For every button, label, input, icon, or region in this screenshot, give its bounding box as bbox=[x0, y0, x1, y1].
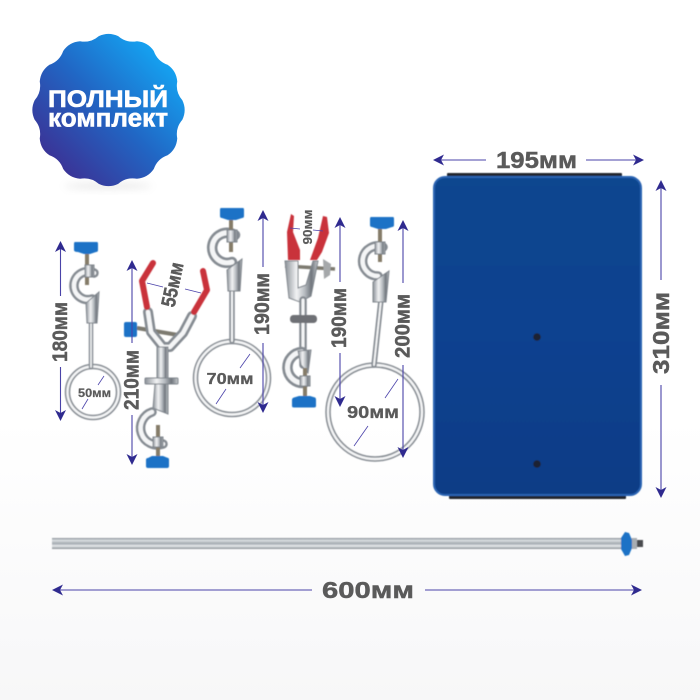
nut bbox=[227, 230, 237, 242]
nut bbox=[85, 265, 94, 277]
blue side knob bbox=[124, 322, 137, 337]
arrow bbox=[660, 187, 662, 491]
lower nut bbox=[153, 437, 163, 447]
arrow bbox=[339, 224, 341, 400]
hook bbox=[212, 233, 235, 263]
label: 195мм bbox=[496, 147, 577, 173]
red right prong bbox=[310, 216, 329, 260]
plate body bbox=[434, 177, 641, 495]
hook bbox=[363, 246, 383, 276]
arrowhead right bbox=[633, 154, 644, 166]
ring bbox=[196, 342, 268, 414]
label: 55мм bbox=[158, 260, 189, 309]
arrow bbox=[402, 227, 404, 451]
ring bbox=[328, 365, 422, 459]
arrowhead bottom bbox=[55, 410, 66, 421]
arrowhead top bbox=[656, 180, 666, 191]
arrow bbox=[60, 248, 62, 414]
upper stem bbox=[157, 347, 168, 380]
leader lines bbox=[216, 354, 250, 404]
ring clamp 50 mm bbox=[68, 242, 118, 418]
nut bbox=[300, 376, 310, 386]
arrowhead right bbox=[631, 584, 642, 596]
badge: full set bbox=[32, 34, 185, 189]
dark plate bbox=[290, 315, 317, 323]
cross plate bbox=[145, 378, 178, 384]
red left prong bbox=[142, 263, 153, 307]
arrowhead top bbox=[398, 220, 408, 231]
lower hole bbox=[533, 460, 541, 468]
dimension: 600 mm bbox=[52, 577, 642, 603]
label: 180мм bbox=[49, 302, 72, 362]
lower knob bbox=[146, 456, 169, 468]
collar bbox=[373, 271, 389, 302]
clamp body bbox=[285, 261, 318, 302]
label: 90мм bbox=[300, 210, 315, 244]
stem bbox=[374, 300, 381, 365]
knob bbox=[292, 396, 316, 408]
hook bbox=[74, 272, 94, 300]
badge text line 2: комплект bbox=[48, 102, 168, 132]
arrowhead bottom bbox=[334, 396, 346, 407]
arrowhead top bbox=[126, 260, 138, 271]
washer bbox=[629, 538, 637, 549]
collar bbox=[227, 259, 242, 291]
arrowhead top bbox=[334, 217, 346, 228]
screw bbox=[303, 368, 307, 398]
blue nut bbox=[621, 532, 632, 556]
jaws bbox=[148, 312, 192, 347]
ring clamp 90 mm bbox=[328, 217, 422, 459]
threaded end bbox=[636, 540, 643, 547]
ring bbox=[68, 366, 118, 418]
lower body bbox=[153, 384, 168, 414]
dimension: 190 mm ring bbox=[251, 210, 274, 413]
dimension: 310 mm bbox=[648, 180, 674, 498]
cross bar bbox=[137, 328, 178, 335]
bottom strip bbox=[449, 491, 626, 499]
red left prong bbox=[287, 214, 300, 260]
dimension: 90 mm ring bbox=[347, 379, 399, 446]
badge shape bbox=[32, 34, 185, 186]
dimension: 190 mm clamp bbox=[328, 217, 351, 407]
dimension: 90 mm jaws bbox=[290, 210, 323, 244]
label: 600мм bbox=[322, 577, 414, 603]
screw bbox=[229, 218, 233, 252]
leader lines bbox=[354, 379, 398, 446]
leader lines bbox=[147, 283, 201, 293]
top strip bbox=[447, 173, 622, 181]
stem bbox=[89, 322, 93, 367]
arrowhead left bbox=[52, 584, 63, 596]
lower screw bbox=[156, 425, 160, 457]
collar bbox=[298, 350, 311, 373]
label: 310мм bbox=[648, 292, 674, 374]
arrow bbox=[59, 589, 635, 591]
rod shaft bbox=[52, 538, 622, 549]
arrowhead left bbox=[433, 154, 444, 166]
dimension: 55 mm jaws bbox=[147, 260, 201, 309]
base plate bbox=[434, 173, 641, 499]
arrowhead bottom bbox=[258, 402, 268, 413]
screw bbox=[85, 251, 89, 285]
stem bbox=[229, 290, 235, 341]
arrow bbox=[131, 267, 133, 458]
wing screw bbox=[285, 266, 335, 269]
knob bbox=[220, 208, 244, 220]
arrowhead bottom bbox=[126, 454, 138, 465]
dimension: 70 mm ring bbox=[206, 354, 254, 404]
knob bbox=[74, 242, 98, 254]
dimension: 50 mm ring bbox=[78, 376, 111, 409]
badge text line 1: ПОЛНЫЙ bbox=[48, 85, 168, 113]
leader lines bbox=[290, 228, 323, 231]
hook bbox=[287, 352, 304, 383]
two-prong clamp 90 mm bbox=[285, 214, 335, 408]
screw bbox=[378, 226, 382, 262]
leader lines bbox=[82, 376, 104, 409]
three-prong clamp 55 mm bbox=[124, 263, 207, 468]
upper hole bbox=[533, 333, 541, 341]
label: 210мм bbox=[120, 350, 144, 410]
label: 190мм bbox=[251, 273, 274, 335]
arrow bbox=[440, 159, 637, 161]
arrow bbox=[262, 217, 264, 406]
lower hook bbox=[141, 412, 163, 445]
label: 200мм bbox=[392, 294, 414, 358]
arrowhead top bbox=[258, 210, 268, 221]
nut bbox=[375, 242, 385, 254]
label: 90мм bbox=[347, 402, 399, 422]
ring clamp 70 mm bbox=[196, 208, 268, 414]
label: 70мм bbox=[206, 371, 254, 388]
dimension: 195 mm bbox=[433, 147, 644, 173]
dimension: 180 mm bbox=[49, 241, 72, 421]
red right prong bbox=[194, 271, 207, 312]
arrowhead bottom bbox=[398, 447, 408, 458]
label: 50мм bbox=[78, 388, 111, 400]
arrowhead top bbox=[55, 241, 66, 252]
dimension: 210 mm bbox=[120, 260, 144, 465]
knob bbox=[370, 217, 394, 229]
arrowhead bottom bbox=[656, 487, 666, 498]
label: 190мм bbox=[328, 288, 351, 348]
dimension: 200 mm bbox=[392, 220, 414, 458]
wing nut bbox=[323, 259, 331, 279]
stem bbox=[299, 300, 307, 365]
collar bbox=[86, 292, 99, 323]
support rod bbox=[52, 532, 643, 556]
